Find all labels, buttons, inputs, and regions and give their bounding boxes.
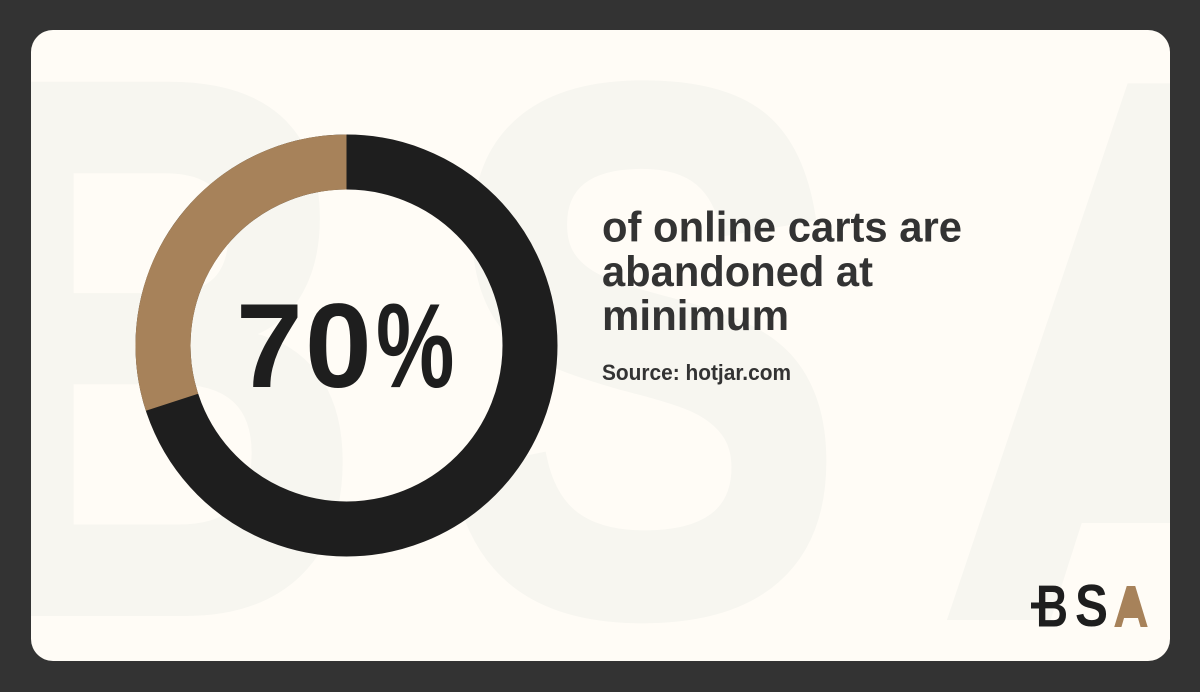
- big number: [236, 279, 454, 413]
- headline: [602, 204, 962, 340]
- logo: BSA: B: [1036, 574, 1068, 640]
- watermark letter A fill: [1081, 150, 1200, 523]
- big number: 70: [236, 279, 372, 413]
- source: Source: hotjar.com: [602, 360, 791, 385]
- headline: of online carts are: [602, 204, 962, 252]
- big number: %: [376, 280, 454, 413]
- logo: BSA: A: [1113, 574, 1149, 640]
- donut chart: 70 percent: [163, 162, 530, 529]
- logo: BSA: [1031, 573, 1149, 640]
- donut segment: remaining 30 percent: [163, 162, 346, 402]
- headline: abandoned at: [602, 248, 873, 296]
- headline: minimum: [602, 292, 789, 340]
- logo: BSA: S: [1075, 573, 1108, 639]
